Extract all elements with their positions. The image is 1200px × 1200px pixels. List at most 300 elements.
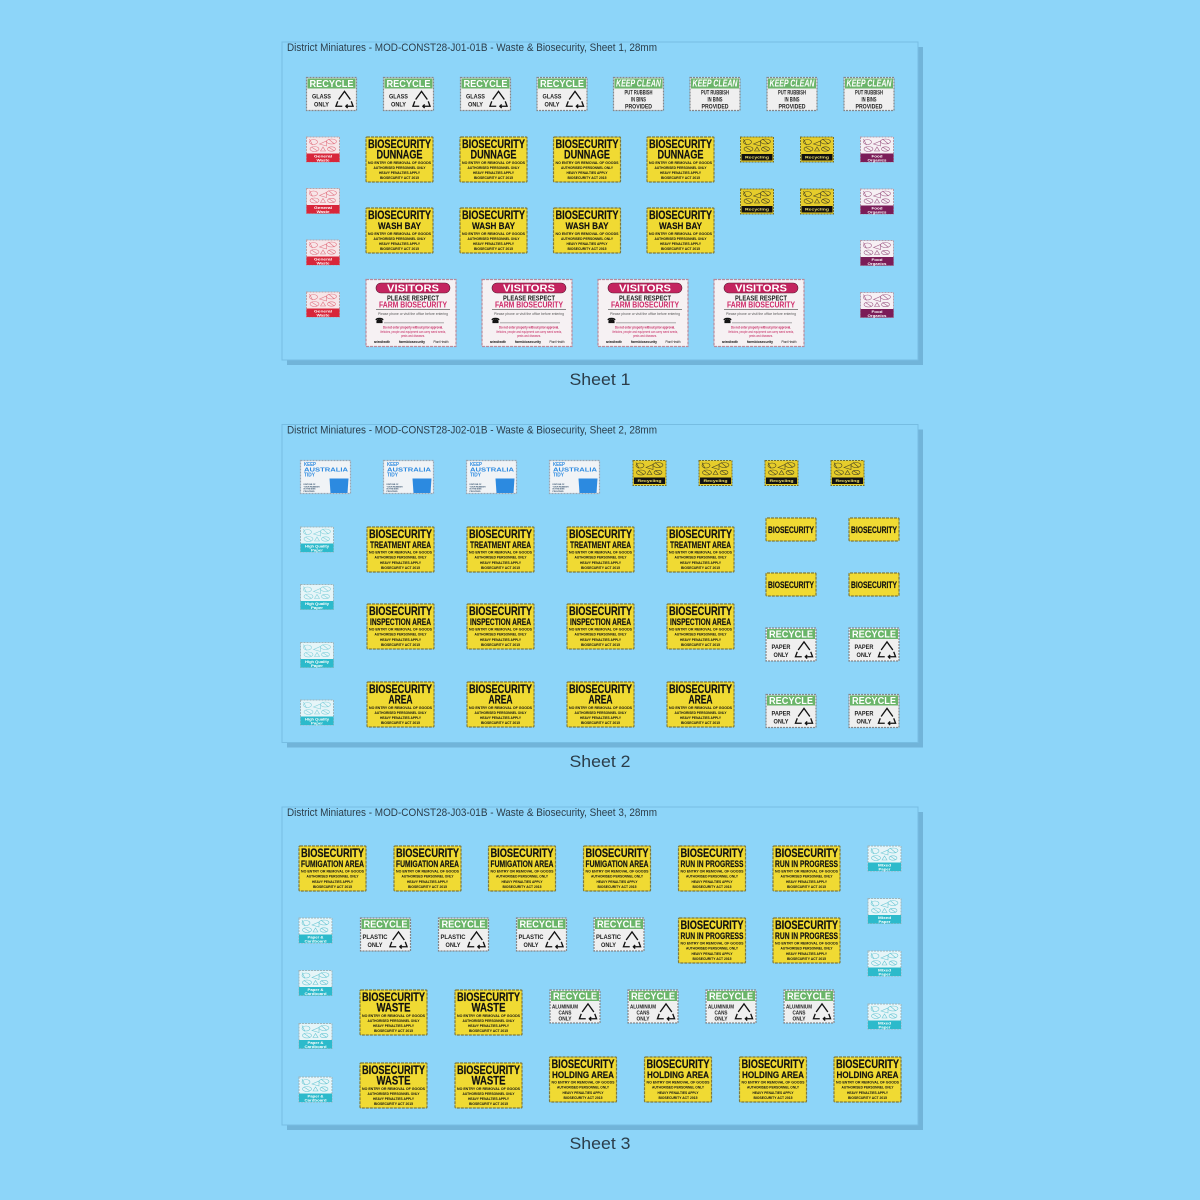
sign: keep clean <box>614 78 664 110</box>
sign: recycle aluminium cans: CANS <box>636 1010 650 1016</box>
sign: recycle aluminium cans: ALUMINIUM <box>552 1004 578 1010</box>
sign: keep australia tidy: KEEP <box>387 462 399 468</box>
sign: biosecurity run in progress: RUN IN PROGRESS <box>680 859 744 870</box>
sign: biosecurity dunnage: HEAVY PENALTIES APPLY <box>660 170 701 175</box>
sign: keep australia tidy: AUSTRALIA <box>304 468 349 474</box>
sign: recycling: Recycling <box>704 479 728 483</box>
sign: biosecurity inspection area <box>667 604 734 649</box>
sign: recycle glass: ONLY <box>468 102 484 108</box>
sign: recycle glass: GLASS <box>312 94 332 100</box>
sign: keep australia tidy: YOUR RUBBISH <box>552 486 569 488</box>
sign: recycle paper: ONLY <box>856 652 872 659</box>
panel: sheet 1 <box>282 42 923 365</box>
sign: keep clean: PROVIDED <box>778 104 806 110</box>
sign: biosecurity short: BIOSECURITY <box>851 525 897 536</box>
sign: biosecurity run in progress: NO ENTRY OR REMOVAL OF GOODS <box>775 940 838 946</box>
sign: high quality paper: High Quality <box>305 717 329 721</box>
sign: visitors farm biosecurity: animalhealth <box>606 339 622 344</box>
sign: visitors farm biosecurity: Vehicles, people and equipment can carry weed seeds, <box>380 330 446 334</box>
sign: recycle plastic: RECYCLE <box>442 920 486 930</box>
sign: biosecurity run in progress: BIOSECURITY <box>775 920 838 932</box>
sign: biosecurity run in progress: NO ENTRY OR REMOVAL OF GOODS <box>680 868 744 874</box>
sign: visitors farm biosecurity: Plant Health <box>434 339 448 344</box>
sign: biosecurity treatment area: TREATMENT AREA <box>670 540 731 551</box>
sign: visitors farm biosecurity <box>366 280 456 346</box>
sign: keep clean: PROVIDED <box>856 104 883 110</box>
sign: biosecurity inspection area <box>567 604 634 649</box>
sign: biosecurity waste: BIOSECURITY <box>362 1065 425 1077</box>
sign: recycle aluminium cans: ALUMINIUM <box>708 1004 734 1010</box>
sign: biosecurity run in progress: NO ENTRY OR REMOVAL OF GOODS <box>680 940 744 946</box>
sign: biosecurity fumigation area: HEAVY PENALTIES APPLY <box>596 879 638 884</box>
sign: biosecurity holding area: AUTHORISED PERSONNEL ONLY <box>747 1084 799 1090</box>
sign: biosecurity fumigation area: BIOSECURITY ACT 2015 <box>502 884 542 889</box>
sign: biosecurity fumigation area: HEAVY PENALTIES APPLY <box>312 879 353 884</box>
sign: biosecurity treatment area: NO ENTRY OR REMOVAL OF GOODS <box>469 550 532 554</box>
sign: biosecurity run in progress: BIOSECURITY ACT 2015 <box>692 956 732 961</box>
sign: keep clean: PUT RUBBISH <box>855 90 883 96</box>
sign: biosecurity dunnage: BIOSECURITY ACT 2015 <box>474 175 514 180</box>
sign: keep clean: IN BINS <box>708 96 723 104</box>
sign: biosecurity short <box>766 573 816 596</box>
sign: keep australia tidy: YOUR RUBBISH <box>470 486 486 488</box>
sign: biosecurity wash bay: BIOSECURITY ACT 2015 <box>380 246 420 251</box>
sign: keep clean: PROVIDED <box>625 104 652 110</box>
sign: recycle aluminium cans: ONLY <box>714 1016 728 1022</box>
sign: biosecurity inspection area <box>467 604 534 649</box>
sign: visitors farm biosecurity: VISITORS <box>735 284 787 294</box>
sign: visitors farm biosecurity: pests and diseases. <box>517 334 541 338</box>
sign: visitors farm biosecurity: animalhealth <box>722 339 738 344</box>
sign: biosecurity area <box>667 682 734 727</box>
sign: biosecurity inspection area: AUTHORISED PERSONNEL ONLY <box>574 632 627 636</box>
sign: general waste: Waste <box>316 210 330 214</box>
sign: recycling: Recycling <box>770 479 794 483</box>
sign: visitors farm biosecurity: FARM BIOSECURITY <box>727 300 795 310</box>
sign: biosecurity treatment area: NO ENTRY OR REMOVAL OF GOODS <box>569 550 632 554</box>
sign: keep australia tidy: PROVIDED <box>386 491 398 493</box>
sign: recycle plastic: PLASTIC <box>440 934 466 941</box>
sign: biosecurity short: BIOSECURITY <box>851 580 897 591</box>
sign: biosecurity waste: BIOSECURITY <box>457 992 520 1004</box>
sign: visitors farm biosecurity: Plant Health <box>550 339 564 344</box>
sign: keep australia tidy <box>550 460 600 494</box>
sign: biosecurity treatment area: BIOSECURITY ACT 2015 <box>481 565 521 570</box>
sign: recycle paper: RECYCLE <box>769 696 813 707</box>
sign: biosecurity area: BIOSECURITY ACT 2015 <box>681 720 721 725</box>
sign: biosecurity holding area: HOLDING AREA <box>552 1070 614 1081</box>
sign: biosecurity waste <box>455 990 522 1035</box>
sign: visitors farm biosecurity: PLEASE RESPECT <box>735 294 787 302</box>
sign: biosecurity waste: NO ENTRY OR REMOVAL OF GOODS <box>457 1013 520 1018</box>
sign: visitors farm biosecurity: Do not enter property without prior approval. <box>383 326 443 330</box>
sign: biosecurity wash bay: BIOSECURITY <box>368 210 431 222</box>
sign: biosecurity treatment area: HEAVY PENALTIES APPLY <box>580 560 621 565</box>
sign: biosecurity wash bay: BIOSECURITY <box>462 210 525 222</box>
sign: recycle glass: RECYCLE <box>386 79 431 90</box>
sign: biosecurity wash bay: HEAVY PENALTIES APPLY <box>379 241 420 246</box>
sign: recycle paper: RECYCLE <box>769 630 813 640</box>
sign: biosecurity treatment area: NO ENTRY OR REMOVAL OF GOODS <box>369 550 432 554</box>
sign: food organics <box>860 240 894 266</box>
sign: recycle plastic <box>516 918 566 951</box>
sign: biosecurity waste: NO ENTRY OR REMOVAL OF GOODS <box>362 1013 425 1018</box>
sign: biosecurity fumigation area: FUMIGATION AREA <box>490 859 554 870</box>
sign: visitors farm biosecurity: FARM BIOSECURITY <box>495 300 563 310</box>
sign: recycling <box>765 460 798 486</box>
sign: biosecurity waste <box>360 990 427 1035</box>
sign: food organics: Organics <box>868 262 886 266</box>
sign: biosecurity dunnage <box>366 137 433 182</box>
sign: visitors farm biosecurity: Please phone or visit the office before entering <box>378 311 448 316</box>
sign: biosecurity run in progress: AUTHORISED PERSONNEL ONLY <box>686 946 738 950</box>
sheet 3 heading: District Miniatures - MOD-CONST28-J03-01B - Waste & Biosecurity, Sheet 3, 28mm <box>287 807 657 819</box>
sign: recycle paper <box>849 694 899 728</box>
sign: biosecurity holding area: NO ENTRY OR REMOVAL OF GOODS <box>646 1080 710 1084</box>
sign: keep australia tidy: IN THE BINS <box>552 489 565 491</box>
sign: keep australia tidy <box>300 460 350 494</box>
sign: visitors farm biosecurity <box>714 280 804 346</box>
sign: visitors farm biosecurity: pests and diseases. <box>633 334 657 338</box>
sign: biosecurity fumigation area: AUTHORISED PERSONNEL ONLY <box>402 874 454 878</box>
sign: paper and cardboard: Cardboard <box>304 1098 326 1102</box>
sign: recycle aluminium cans: ALUMINIUM <box>786 1004 812 1010</box>
sign: biosecurity treatment area: AUTHORISED PERSONNEL ONLY <box>574 554 627 560</box>
panel: sheet 2 <box>282 424 923 748</box>
sign: biosecurity inspection area: INSPECTION AREA <box>570 617 631 628</box>
sign: recycle glass <box>537 78 587 110</box>
sign: biosecurity fumigation area: BIOSECURITY ACT 2015 <box>408 884 448 889</box>
sign: recycle aluminium cans: CANS <box>792 1010 806 1016</box>
sign: biosecurity inspection area: INSPECTION AREA <box>370 617 431 628</box>
sign: biosecurity treatment area: AUTHORISED PERSONNEL ONLY <box>674 554 727 560</box>
sign: biosecurity wash bay: NO ENTRY OR REMOVAL OF GOODS <box>462 231 525 236</box>
sign: keep clean: KEEP CLEAN <box>616 78 662 90</box>
sign: biosecurity fumigation area: BIOSECURITY ACT 2015 <box>313 884 353 889</box>
sign: biosecurity holding area: HOLDING AREA <box>647 1070 709 1081</box>
sign: biosecurity inspection area: BIOSECURITY <box>569 606 632 618</box>
sign: biosecurity run in progress <box>773 918 840 963</box>
sign: biosecurity fumigation area: FUMIGATION AREA <box>396 859 459 870</box>
sign: biosecurity dunnage: NO ENTRY OR REMOVAL OF GOODS <box>649 160 712 165</box>
sign: biosecurity holding area: NO ENTRY OR REMOVAL OF GOODS <box>552 1080 615 1084</box>
sign: biosecurity inspection area: HEAVY PENALTIES APPLY <box>580 637 621 642</box>
sign: high quality paper <box>300 700 334 725</box>
sign: visitors farm biosecurity: Do not enter property without prior approval. <box>615 326 675 330</box>
sign: visitors farm biosecurity: Do not enter property without prior approval. <box>731 326 791 330</box>
sign: visitors farm biosecurity: Plant Health <box>782 339 796 344</box>
sign: biosecurity waste: AUTHORISED PERSONNEL ONLY <box>462 1091 515 1096</box>
sign: recycling <box>699 460 732 486</box>
sign: high quality paper: Paper <box>311 721 324 725</box>
sign: biosecurity holding area: BIOSECURITY <box>742 1059 805 1071</box>
sign: paper and cardboard: Cardboard <box>304 1045 326 1049</box>
sign: recycling <box>633 460 666 486</box>
sign: general waste <box>306 188 340 214</box>
sign: biosecurity area: AUTHORISED PERSONNEL ONLY <box>474 710 527 715</box>
sign: biosecurity run in progress: HEAVY PENALTIES APPLY <box>786 879 827 884</box>
sign: recycling: Recycling <box>638 479 662 483</box>
sign: biosecurity waste: BIOSECURITY ACT 2015 <box>469 1028 509 1033</box>
sign: paper and cardboard: Paper & <box>308 1041 324 1045</box>
sign: general waste: General <box>314 257 332 261</box>
sign: recycle aluminium cans: CANS <box>714 1010 728 1016</box>
sign: biosecurity holding area: NO ENTRY OR REMOVAL OF GOODS <box>836 1080 899 1084</box>
sign: visitors farm biosecurity <box>482 280 572 346</box>
sign: biosecurity holding area: HOLDING AREA <box>836 1070 899 1081</box>
sign: biosecurity dunnage <box>554 137 620 182</box>
sign: biosecurity short <box>849 573 899 596</box>
sign: visitors farm biosecurity: ☎ <box>375 317 384 325</box>
sign: keep australia tidy: AUSTRALIA <box>553 468 598 474</box>
sign: mixed paper: Paper <box>878 972 891 976</box>
sign: general waste: General <box>314 309 332 313</box>
sign: paper and cardboard: Cardboard <box>304 992 326 996</box>
sign: mixed paper: Mixed <box>878 916 891 920</box>
sign: high quality paper <box>300 584 334 610</box>
sign: recycle plastic: ONLY <box>368 942 383 949</box>
sign: visitors farm biosecurity: ☎ <box>491 317 500 325</box>
sheet 2 heading: District Miniatures - MOD-CONST28-J02-01B - Waste & Biosecurity, Sheet 2, 28mm <box>287 424 657 436</box>
sign: biosecurity treatment area <box>567 527 634 572</box>
sign: keep australia tidy: PROVIDED <box>470 491 481 493</box>
sign: recycle aluminium cans: RECYCLE <box>631 992 675 1002</box>
sign: keep australia tidy: YOUR RUBBISH <box>386 486 403 488</box>
sign: biosecurity waste: BIOSECURITY ACT 2015 <box>374 1028 414 1033</box>
sign: biosecurity area: NO ENTRY OR REMOVAL OF GOODS <box>369 705 432 710</box>
sign: biosecurity fumigation area: BIOSECURITY <box>490 848 554 860</box>
sign: recycle paper: PAPER <box>772 710 791 718</box>
sign: biosecurity wash bay: BIOSECURITY ACT 2015 <box>474 246 514 251</box>
sign: biosecurity treatment area: AUTHORISED PERSONNEL ONLY <box>474 554 527 560</box>
sign: biosecurity inspection area: BIOSECURITY <box>369 606 432 618</box>
sign: biosecurity treatment area: HEAVY PENALTIES APPLY <box>380 560 421 565</box>
sign: general waste: Waste <box>316 261 330 265</box>
sign: biosecurity run in progress <box>678 918 746 963</box>
sign: recycling <box>800 189 834 214</box>
sign: biosecurity holding area: BIOSECURITY ACT 2015 <box>754 1095 793 1100</box>
sign: biosecurity fumigation area: AUTHORISED PERSONNEL ONLY <box>591 874 643 878</box>
sign: visitors farm biosecurity: Please phone or visit the office before entering <box>610 311 680 316</box>
sign: biosecurity wash bay <box>554 208 620 253</box>
sign: biosecurity area: AREA <box>488 694 512 706</box>
sign: biosecurity run in progress: HEAVY PENALTIES APPLY <box>692 879 733 884</box>
sign: recycle glass: RECYCLE <box>464 79 508 90</box>
sign: keep australia tidy: DISPOSE OF <box>552 484 565 486</box>
sign: biosecurity waste: NO ENTRY OR REMOVAL OF GOODS <box>457 1086 520 1091</box>
sign: biosecurity run in progress: AUTHORISED PERSONNEL ONLY <box>780 946 833 950</box>
sign: recycle paper <box>766 628 816 661</box>
sign: biosecurity wash bay: HEAVY PENALTIES APPLY <box>566 241 608 246</box>
sign: biosecurity holding area <box>644 1057 712 1102</box>
sign: biosecurity wash bay <box>366 208 433 253</box>
sign: biosecurity area: AUTHORISED PERSONNEL ONLY <box>374 710 427 715</box>
sign: biosecurity fumigation area: AUTHORISED PERSONNEL ONLY <box>306 874 359 878</box>
sign: visitors farm biosecurity: Vehicles, people and equipment can carry weed seeds, <box>612 330 678 334</box>
sign: recycle plastic: PLASTIC <box>518 934 544 941</box>
sign: biosecurity fumigation area: BIOSECURITY <box>586 848 649 860</box>
sign: biosecurity holding area: BIOSECURITY <box>552 1059 615 1071</box>
sign: keep clean: KEEP CLEAN <box>770 78 815 90</box>
sign: food organics <box>860 137 894 162</box>
sign: high quality paper: High Quality <box>305 660 329 664</box>
sign: biosecurity wash bay: WASH BAY <box>566 221 609 232</box>
sign: biosecurity inspection area: NO ENTRY OR REMOVAL OF GOODS <box>669 626 732 632</box>
sign: biosecurity dunnage: NO ENTRY OR REMOVAL OF GOODS <box>556 160 619 165</box>
sign: biosecurity holding area: BIOSECURITY <box>646 1059 710 1071</box>
sign: recycle aluminium cans: ONLY <box>792 1016 806 1022</box>
sign: keep australia tidy: TIDY <box>553 472 564 478</box>
sign: biosecurity area: AREA <box>588 694 612 706</box>
sign: biosecurity treatment area: HEAVY PENALTIES APPLY <box>680 560 721 565</box>
sign: visitors farm biosecurity: Please phone or visit the office before entering <box>726 311 796 316</box>
sign: biosecurity wash bay: BIOSECURITY <box>556 210 619 222</box>
sign: biosecurity dunnage: BIOSECURITY <box>462 139 525 151</box>
sign: biosecurity holding area: BIOSECURITY <box>836 1059 899 1071</box>
sign: biosecurity fumigation area: HEAVY PENALTIES APPLY <box>407 879 448 884</box>
sign: recycle aluminium cans: ONLY <box>636 1016 650 1022</box>
sign: biosecurity waste: AUTHORISED PERSONNEL ONLY <box>368 1018 420 1023</box>
sign: food organics <box>860 189 894 214</box>
sign: mixed paper: Paper <box>878 1025 891 1029</box>
sign: recycle plastic: ONLY <box>524 942 539 949</box>
sign: mixed paper <box>868 846 901 871</box>
sign: visitors farm biosecurity: Vehicles, people and equipment can carry weed seeds, <box>728 330 794 334</box>
sign: visitors farm biosecurity: Vehicles, people and equipment can carry weed seeds, <box>496 330 562 334</box>
sign: keep australia tidy: AUSTRALIA <box>387 468 432 474</box>
sign: biosecurity area: HEAVY PENALTIES APPLY <box>680 715 721 720</box>
sign: biosecurity run in progress: HEAVY PENALTIES APPLY <box>692 951 733 956</box>
sign: biosecurity waste: HEAVY PENALTIES APPLY <box>468 1023 509 1028</box>
sign: biosecurity waste: WASTE <box>472 1002 506 1014</box>
panel: sheet 3 <box>282 807 923 1130</box>
sign: biosecurity treatment area: BIOSECURITY <box>369 529 432 541</box>
sign: biosecurity treatment area: HEAVY PENALTIES APPLY <box>480 560 521 565</box>
sign: recycle glass <box>384 78 434 110</box>
sign: biosecurity holding area: BIOSECURITY ACT 2015 <box>658 1095 698 1100</box>
sign: recycle aluminium cans <box>628 990 678 1023</box>
sign: biosecurity dunnage: BIOSECURITY <box>556 139 619 151</box>
sign: keep clean <box>690 78 740 110</box>
sign: biosecurity holding area: HEAVY PENALTIES APPLY <box>562 1090 604 1095</box>
sign: biosecurity dunnage: BIOSECURITY ACT 2015 <box>568 175 607 180</box>
sign: biosecurity fumigation area <box>299 846 366 891</box>
sign: biosecurity waste: NO ENTRY OR REMOVAL OF GOODS <box>362 1086 425 1091</box>
sign: food organics: Organics <box>868 158 886 162</box>
sign: recycle glass: RECYCLE <box>310 79 354 90</box>
sign: keep clean: PUT RUBBISH <box>778 90 806 96</box>
sign: biosecurity dunnage: HEAVY PENALTIES APPLY <box>566 170 608 175</box>
sign: biosecurity short <box>849 518 899 541</box>
sign: visitors farm biosecurity: farmbiosecurity <box>631 339 658 344</box>
sign: visitors farm biosecurity: animalhealth <box>374 339 390 344</box>
sign: biosecurity holding area: HEAVY PENALTIES APPLY <box>847 1090 888 1095</box>
sign: recycling <box>740 189 774 214</box>
sign: high quality paper: Paper <box>311 548 324 552</box>
sign: biosecurity dunnage: BIOSECURITY ACT 2015 <box>661 175 701 180</box>
sign: recycle paper: PAPER <box>854 710 874 718</box>
sign: general waste <box>306 240 340 265</box>
sign: biosecurity inspection area: HEAVY PENALTIES APPLY <box>680 637 721 642</box>
sign: biosecurity dunnage: HEAVY PENALTIES APPLY <box>379 170 420 175</box>
sign: biosecurity waste: BIOSECURITY ACT 2015 <box>374 1101 414 1106</box>
sign: recycle plastic <box>360 918 410 951</box>
sign: biosecurity area: AUTHORISED PERSONNEL ONLY <box>574 710 627 715</box>
sign: recycle plastic: PLASTIC <box>362 934 388 941</box>
sign: biosecurity wash bay: NO ENTRY OR REMOVAL OF GOODS <box>556 231 619 236</box>
sign: biosecurity treatment area: BIOSECURITY ACT 2015 <box>681 565 721 570</box>
sheet 1 heading: District Miniatures - MOD-CONST28-J01-01B - Waste & Biosecurity, Sheet 1, 28mm <box>287 42 657 54</box>
sign: biosecurity holding area <box>834 1057 901 1102</box>
sign: recycle paper: ONLY <box>774 718 789 726</box>
sign: biosecurity inspection area: BIOSECURITY <box>469 606 532 618</box>
sign: biosecurity fumigation area: AUTHORISED PERSONNEL ONLY <box>496 874 548 878</box>
sign: biosecurity waste: AUTHORISED PERSONNEL ONLY <box>462 1018 515 1023</box>
sign: keep clean: KEEP CLEAN <box>692 78 738 90</box>
sign: biosecurity area <box>367 682 434 727</box>
sign: keep australia tidy <box>466 460 516 494</box>
sign: recycle paper: ONLY <box>856 718 872 726</box>
sign: recycling: Recycling <box>745 156 769 160</box>
sign: biosecurity short <box>766 518 816 541</box>
sign: biosecurity dunnage: HEAVY PENALTIES APPLY <box>473 170 514 175</box>
sign: keep clean: PROVIDED <box>702 104 729 110</box>
sign: biosecurity run in progress: BIOSECURITY <box>775 848 838 860</box>
sign: visitors farm biosecurity: FARM BIOSECURITY <box>379 300 447 310</box>
sign: biosecurity inspection area: BIOSECURITY ACT 2015 <box>381 642 421 647</box>
sign: paper and cardboard: Paper & <box>308 935 324 939</box>
sign: biosecurity inspection area: HEAVY PENALTIES APPLY <box>480 637 521 642</box>
sign: visitors farm biosecurity: pests and diseases. <box>401 334 425 338</box>
sign: keep clean: KEEP CLEAN <box>846 78 892 90</box>
sign: biosecurity waste: HEAVY PENALTIES APPLY <box>373 1096 414 1101</box>
sign: biosecurity inspection area: BIOSECURITY ACT 2015 <box>581 642 621 647</box>
sign: biosecurity dunnage: BIOSECURITY <box>649 139 712 151</box>
sign: biosecurity treatment area <box>667 527 734 572</box>
sign: visitors farm biosecurity: pests and diseases. <box>749 334 773 338</box>
sign: keep clean: IN BINS <box>862 96 877 104</box>
sign: recycle glass: GLASS <box>542 94 562 100</box>
sign: biosecurity holding area: AUTHORISED PERSONNEL ONLY <box>652 1084 704 1090</box>
sign: keep clean: IN BINS <box>784 96 800 104</box>
sign: keep australia tidy: IN THE BINS <box>470 489 482 491</box>
sign: high quality paper: High Quality <box>305 602 329 606</box>
sign: mixed paper <box>868 898 901 924</box>
sign: recycle paper: RECYCLE <box>852 696 896 707</box>
sign: visitors farm biosecurity: Please phone or visit the office before entering <box>494 311 564 316</box>
sign: recycle glass: GLASS <box>389 94 409 100</box>
sign: food organics: Organics <box>868 314 886 318</box>
sign: biosecurity treatment area: BIOSECURITY <box>469 529 532 541</box>
sign: paper and cardboard: Cardboard <box>304 939 326 943</box>
sign: biosecurity treatment area: BIOSECURITY <box>569 529 632 541</box>
sign: keep australia tidy: PROVIDED <box>304 491 315 493</box>
sign: biosecurity holding area: BIOSECURITY ACT 2015 <box>848 1095 888 1100</box>
sign: biosecurity inspection area: BIOSECURITY ACT 2015 <box>681 642 721 647</box>
sign: biosecurity run in progress: BIOSECURITY <box>680 920 744 932</box>
sign: food organics <box>860 292 894 318</box>
sign: high quality paper: High Quality <box>305 544 329 548</box>
sign: biosecurity treatment area: TREATMENT AREA <box>470 540 531 551</box>
sign: biosecurity holding area: NO ENTRY OR REMOVAL OF GOODS <box>742 1080 805 1084</box>
sign: high quality paper: Paper <box>311 606 324 610</box>
sign: biosecurity wash bay: WASH BAY <box>472 221 516 232</box>
sign: biosecurity waste: AUTHORISED PERSONNEL ONLY <box>368 1091 420 1096</box>
sign: visitors farm biosecurity: farmbiosecurity <box>515 339 542 344</box>
sign: biosecurity waste: HEAVY PENALTIES APPLY <box>468 1096 509 1101</box>
caption: sheet 3: Sheet 3 <box>570 1134 630 1153</box>
sign: biosecurity waste: HEAVY PENALTIES APPLY <box>373 1023 414 1028</box>
